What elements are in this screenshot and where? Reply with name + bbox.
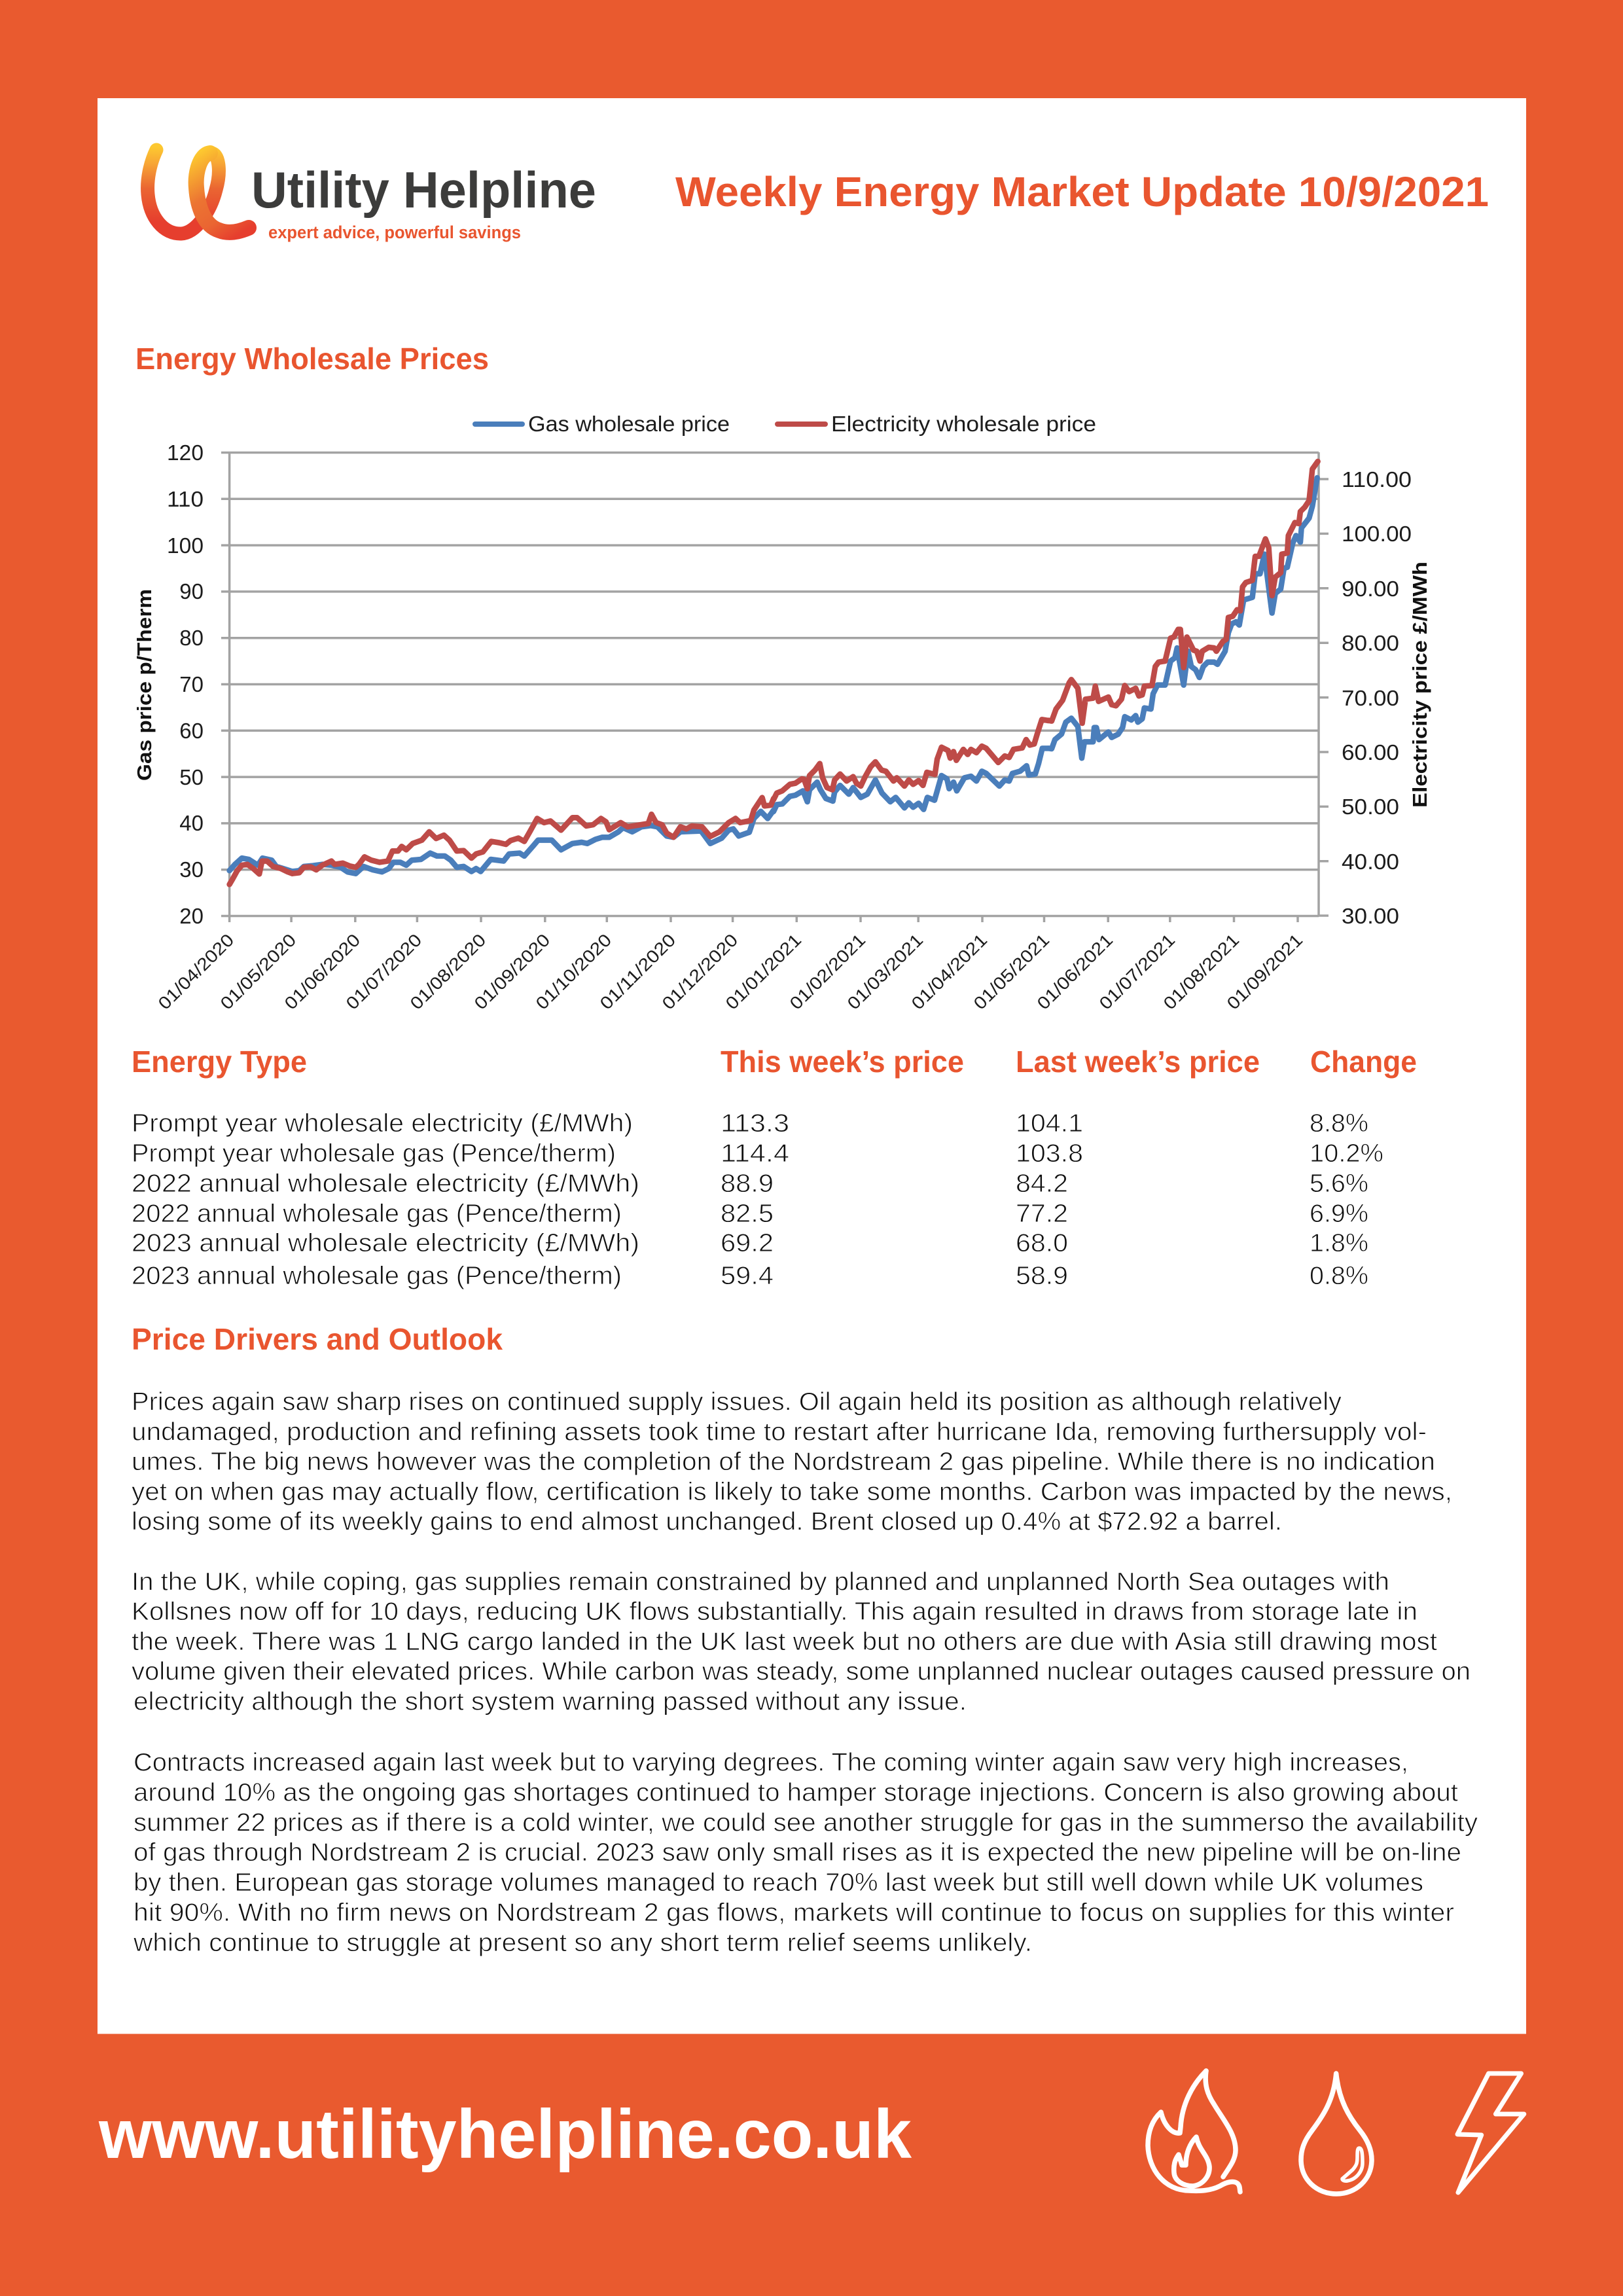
logo wordmark: Utility Helpline (251, 161, 596, 219)
text block: paragraph 3: of gas through Nordstream 2 is crucial. 2023 saw only small rises as it is expected the new pipeline will be on-line (134, 1839, 1461, 1867)
row: prompt year electricity: 104.1 (1016, 1109, 1083, 1138)
gridlines and axes (221, 452, 1329, 922)
icon: gas flame (1148, 2071, 1240, 2192)
chart: gas and electricity wholesale prices (133, 412, 1431, 1013)
row: 2022 electricity: 84.2 (1016, 1170, 1068, 1198)
date axis labels: 01/08/2020 (406, 930, 490, 1013)
left axis labels: 30 (179, 857, 204, 882)
text block: paragraph 3 (133, 1749, 1478, 1957)
electricity price line (230, 461, 1318, 884)
text block: paragraph 3: by then. European gas storage volumes managed to reach 70% last week but still well down while UK volumes (134, 1869, 1423, 1897)
left axis labels: 80 (179, 626, 204, 650)
right axis labels: 30.00 (1342, 904, 1399, 928)
row: 2022 electricity: 88.9 (721, 1170, 774, 1198)
row: 2022 gas (132, 1200, 1368, 1228)
right axis title: Electricity price £/MWh (1408, 562, 1431, 808)
text block: paragraph 1: umes. The big news however was the completion of the Nordstream 2 gas pipeline. While there is no indication (132, 1448, 1435, 1476)
date axis labels: 01/04/2021 (908, 930, 991, 1013)
text block: paragraph 2: electricity although the short system warning passed without any issue. (134, 1687, 967, 1716)
left axis labels: 20 (179, 904, 204, 928)
white content panel (98, 98, 1526, 2034)
left axis labels: 100 (167, 533, 204, 558)
date axis labels: 01/09/2020 (471, 930, 554, 1013)
row: 2023 electricity: 68.0 (1016, 1229, 1068, 1257)
heading: Energy Wholesale Prices: Energy Wholesale Prices (135, 342, 489, 376)
row: 2023 gas: 59.4 (721, 1262, 774, 1290)
date axis labels: 01/06/2020 (281, 930, 364, 1013)
left axis labels: 60 (179, 719, 204, 743)
right axis labels: 90.00 (1342, 577, 1399, 601)
table header: Energy Type (132, 1045, 307, 1079)
text block: paragraph 2 (132, 1568, 1471, 1716)
row: prompt year gas (132, 1139, 1383, 1168)
text block: paragraph 2: volume given their elevated prices. While carbon was steady, some unplanned nuclear outages caused pressure on (132, 1657, 1471, 1686)
date axis labels: 01/02/2021 (786, 930, 869, 1013)
title: Weekly Energy Market Update 10/9/2021 (675, 168, 1489, 215)
row: prompt year gas: Prompt year wholesale gas (Pence/therm) (132, 1139, 616, 1168)
date axis labels: 01/05/2020 (217, 930, 300, 1013)
left axis labels: 120 (167, 440, 204, 465)
row: prompt year electricity: 8.8% (1310, 1109, 1368, 1138)
date axis labels: 01/04/2020 (154, 930, 238, 1013)
legend: Electricity wholesale price (831, 412, 1096, 436)
date axis labels: 01/08/2021 (1160, 930, 1243, 1013)
text block: paragraph 2: the week. There was 1 LNG cargo landed in the UK last week but no others are due with Asia still drawing most (132, 1628, 1437, 1656)
logo tagline: expert advice, powerful savings (268, 223, 521, 242)
text block: paragraph 3: which continue to struggle at present so any short term relief seems unlikely. (133, 1929, 1032, 1957)
table header: This week’s price (721, 1045, 964, 1079)
date axis labels: 01/07/2021 (1096, 930, 1179, 1013)
website URL: www.utilityhelpline.co.uk (98, 2096, 912, 2173)
left axis labels: 40 (179, 811, 204, 835)
row: 2023 gas: 0.8% (1310, 1262, 1368, 1290)
text block: paragraph 3: summer 22 prices as if there is a cold winter, we could see another struggle for gas in the summerso the availability (134, 1809, 1478, 1837)
text block: paragraph 2: Kollsnes now off for 10 days, reducing UK flows substantially. This again resulted in draws from storage late in (132, 1598, 1418, 1626)
row: 2023 gas: 2023 annual wholesale gas (Pence/therm) (132, 1262, 622, 1290)
heading: Price Drivers and Outlook: Price Drivers and Outlook (132, 1322, 503, 1356)
row: prompt year electricity: 113.3 (721, 1109, 789, 1138)
left axis title: Gas price p/Therm (133, 589, 156, 781)
text block: paragraph 1 (132, 1388, 1452, 1535)
text block: paragraph 3: hit 90%. With no firm news on Nordstream 2 gas flows, markets will continue to focus on supplies for this winter (134, 1899, 1454, 1927)
text block: paragraph 1: losing some of its weekly gains to end almost unchanged. Brent closed up 0.4% at $72.92 a barrel. (132, 1508, 1282, 1535)
row: 2023 electricity: 2023 annual wholesale electricity (£/MWh) (132, 1229, 639, 1257)
row: 2022 gas: 82.5 (721, 1200, 774, 1228)
row: prompt year electricity: Prompt year wholesale electricity (£/MWh) (132, 1109, 633, 1138)
left axis labels (167, 440, 204, 928)
right axis labels: 50.00 (1342, 795, 1399, 819)
table header: Last week’s price (1016, 1045, 1260, 1079)
date axis labels: 01/09/2021 (1223, 930, 1306, 1013)
row: 2023 electricity (132, 1229, 1368, 1257)
right axis labels: 60.00 (1342, 740, 1399, 764)
row: prompt year gas: 103.8 (1016, 1139, 1083, 1168)
row: 2022 gas: 6.9% (1310, 1200, 1368, 1228)
legend: Gas wholesale price (528, 412, 730, 436)
row: prompt year electricity (132, 1109, 1368, 1138)
date axis labels (154, 930, 1306, 1013)
row: prompt year gas: 114.4 (721, 1139, 789, 1168)
row: 2022 electricity: 5.6% (1310, 1170, 1368, 1198)
text block: paragraph 3: around 10% as the ongoing gas shortages continued to hamper storage injections. Concern is also growing about (134, 1779, 1458, 1806)
text block: paragraph 1: yet on when gas may actually flow, certification is likely to take some months. Carbon was impacted by the news, (132, 1478, 1452, 1506)
date axis labels: 01/05/2021 (970, 930, 1053, 1013)
left axis labels: 90 (179, 579, 204, 603)
row: 2023 electricity: 69.2 (721, 1229, 774, 1257)
row: prompt year gas: 10.2% (1310, 1139, 1383, 1168)
text block: paragraph 1: undamaged, production and refining assets took time to restart after hurricane Ida, removing furthersupply vol- (132, 1418, 1427, 1446)
date axis labels: 01/11/2020 (596, 930, 679, 1013)
date axis labels: 01/01/2021 (722, 930, 805, 1013)
table header (132, 1045, 1417, 1079)
gas price line (230, 478, 1317, 874)
date axis labels: 01/03/2021 (844, 930, 927, 1013)
row: 2022 electricity (132, 1170, 1368, 1198)
text block: paragraph 1: Prices again saw sharp rises on continued supply issues. Oil again held its position as although relatively (132, 1388, 1342, 1416)
text block: paragraph 2: In the UK, while coping, gas supplies remain constrained by planned and unplanned North Sea outages with (132, 1568, 1389, 1596)
right axis labels: 40.00 (1342, 850, 1399, 874)
icon: water drop (1301, 2073, 1372, 2194)
row: 2022 electricity: 2022 annual wholesale electricity (£/MWh) (132, 1170, 639, 1198)
date axis labels: 01/10/2020 (532, 930, 615, 1013)
right axis labels: 100.00 (1342, 522, 1412, 546)
date axis labels: 01/06/2021 (1033, 930, 1116, 1013)
logo mark: looped U (148, 150, 249, 234)
right axis labels: 110.00 (1342, 467, 1412, 492)
row: 2023 electricity: 1.8% (1310, 1229, 1368, 1257)
right axis labels (1342, 467, 1412, 928)
table header: Change (1310, 1045, 1417, 1079)
left axis labels: 50 (179, 765, 204, 789)
price table (132, 1045, 1417, 1290)
text block: paragraph 3: Contracts increased again last week but to varying degrees. The coming winter again saw very high increases, (134, 1749, 1408, 1776)
right axis labels: 70.00 (1342, 686, 1399, 710)
row: 2022 gas: 2022 annual wholesale gas (Pence/therm) (132, 1200, 622, 1228)
left axis labels: 70 (179, 672, 204, 696)
icon: lightning bolt (1457, 2073, 1524, 2193)
row: 2023 gas (132, 1262, 1368, 1290)
row: 2022 gas: 77.2 (1016, 1200, 1068, 1228)
logo: Utility Helpline (148, 150, 596, 242)
legend (475, 412, 1096, 436)
date axis labels: 01/07/2020 (342, 930, 425, 1013)
left axis labels: 110 (167, 487, 204, 511)
row: 2023 gas: 58.9 (1016, 1262, 1068, 1290)
right axis labels: 80.00 (1342, 631, 1399, 655)
date axis labels: 01/12/2020 (658, 930, 741, 1013)
